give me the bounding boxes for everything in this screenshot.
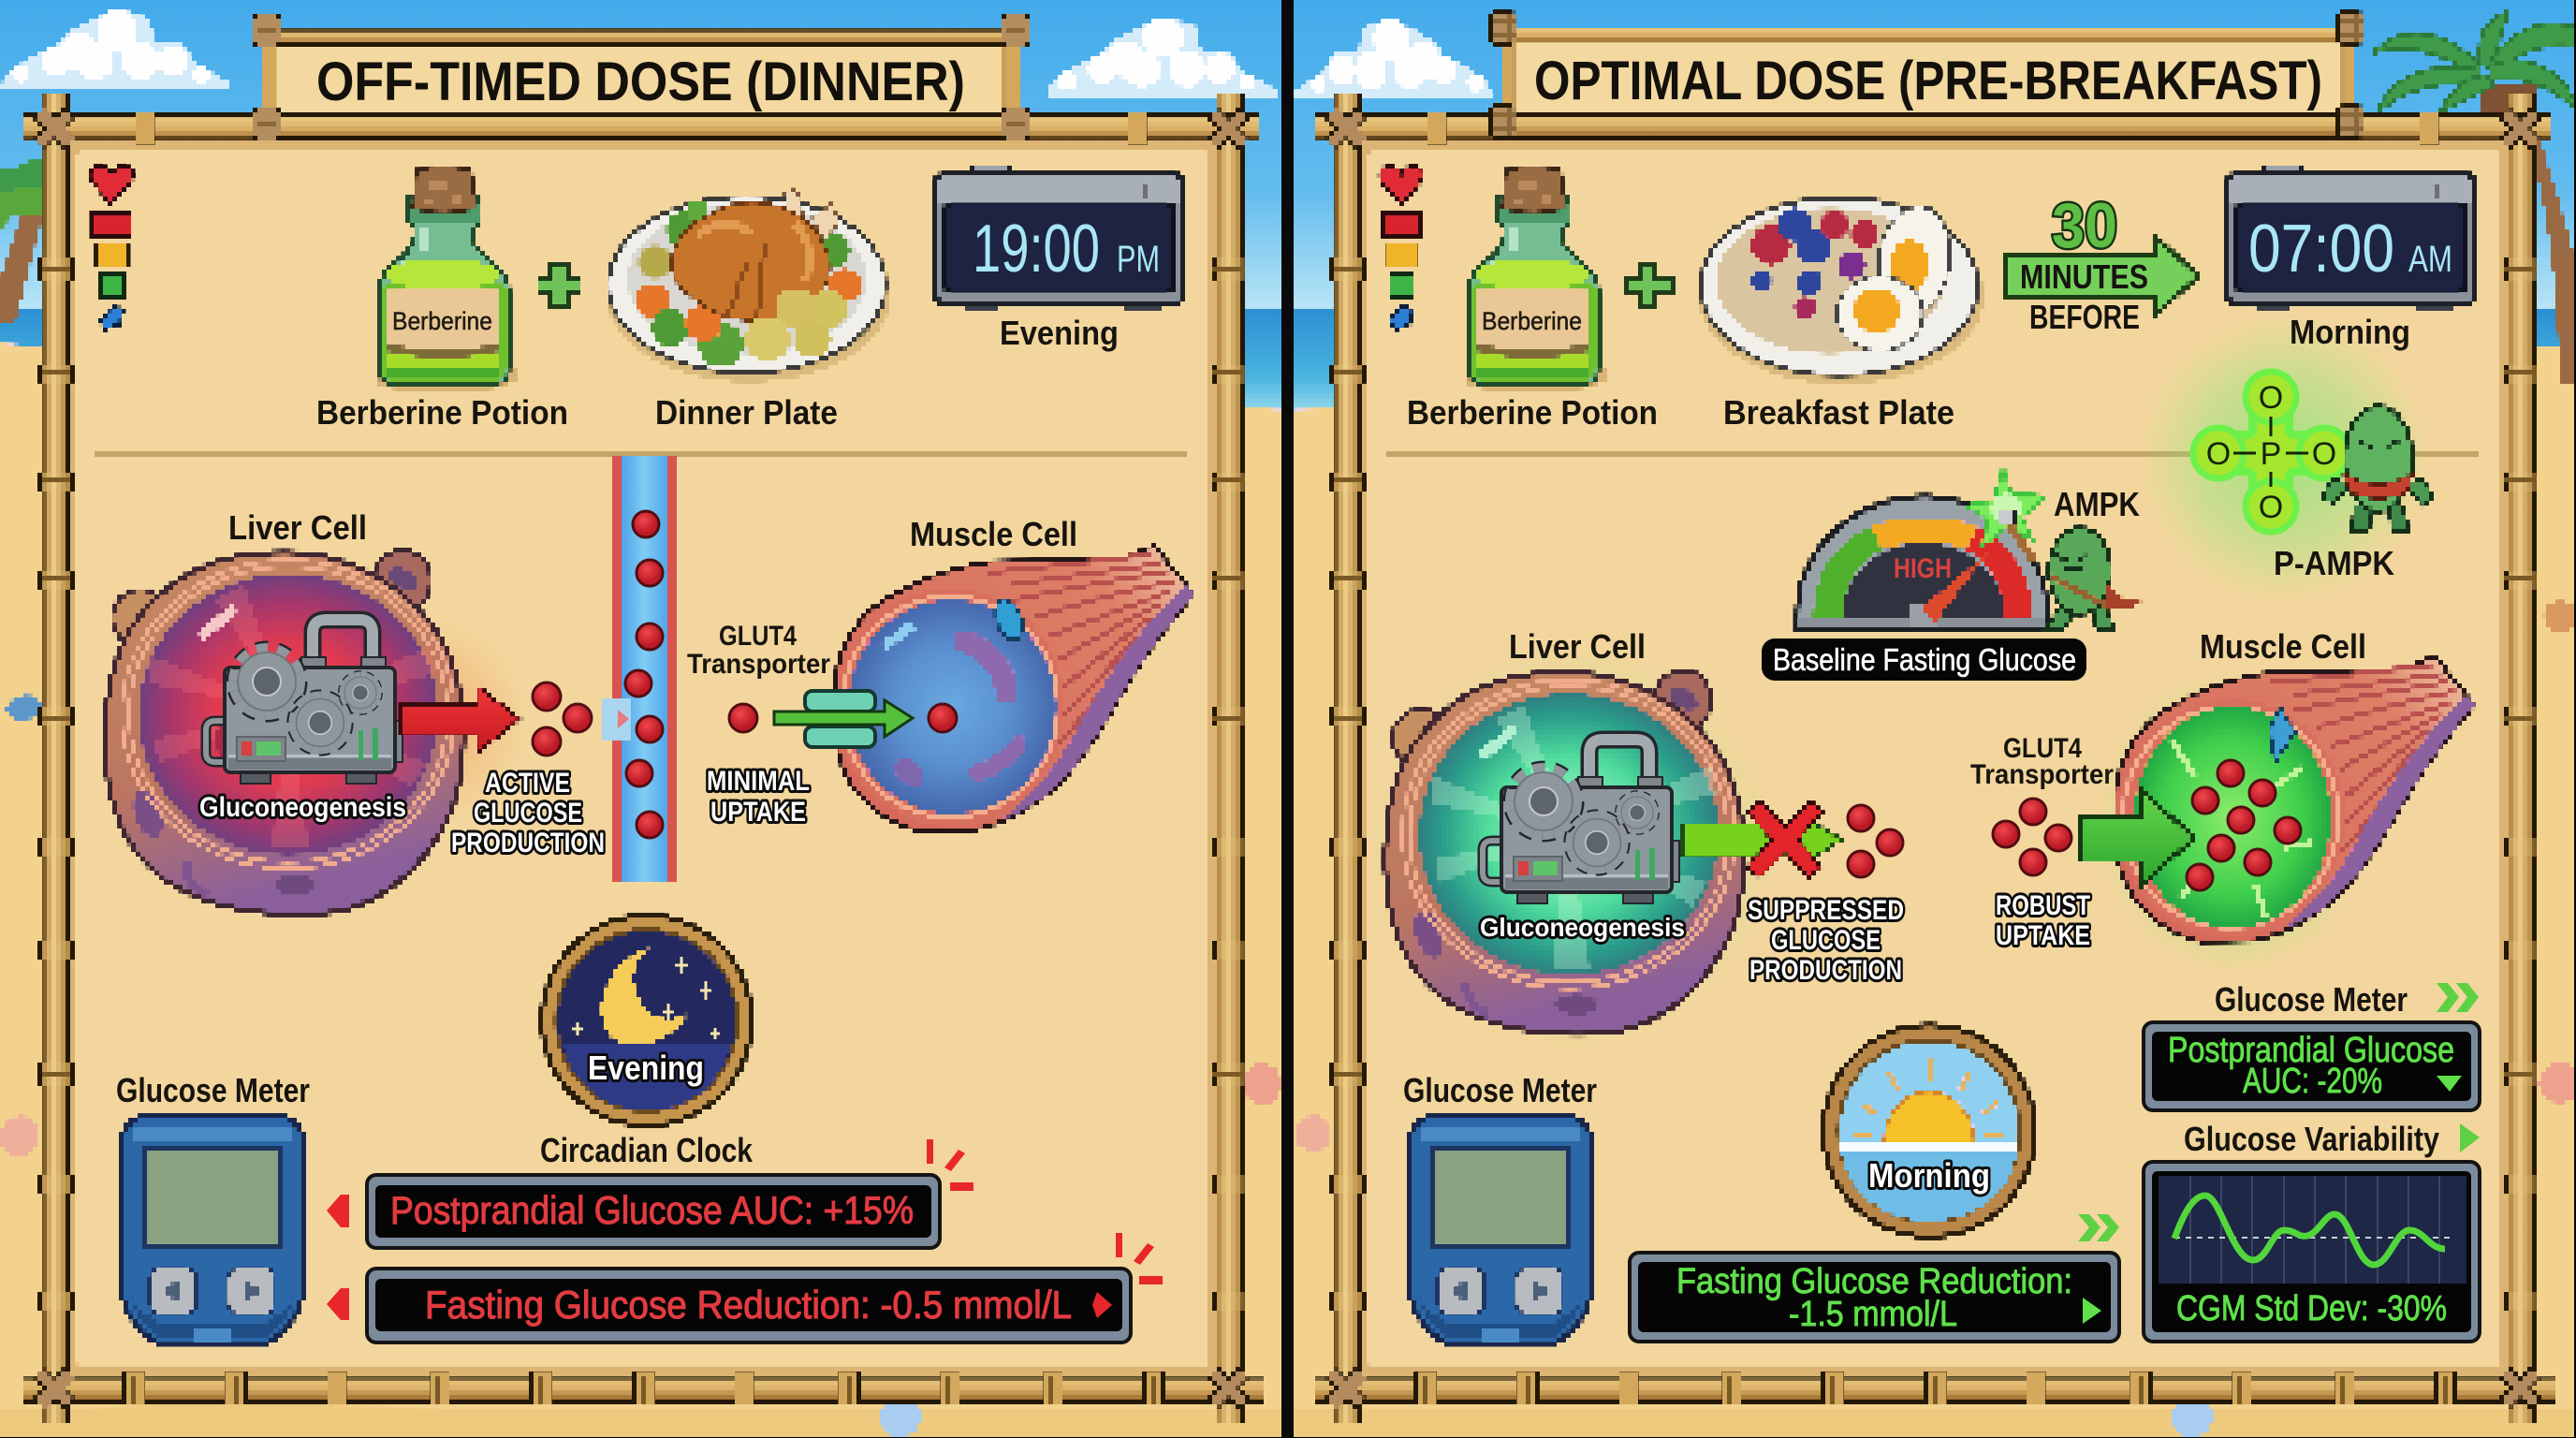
icon: dinner plate [607,190,891,382]
label: circadian clock: Circadian Clock [540,1131,754,1169]
label: breakfast plate: Breakfast Plate [1723,393,1954,432]
title plaque right [1490,12,2364,139]
arrow: 30 minutes before [2006,190,2198,336]
label: glut4 transporter [687,621,830,680]
p-ampk phosphate and creature [2139,314,2434,604]
icon: plus [538,264,580,307]
glucose dot [729,704,757,732]
status icons [1380,167,1423,330]
liver cell: green [1371,646,1774,1049]
readout: postprandial glucose [367,1175,940,1248]
machine [206,620,402,784]
gauge: baseline fasting glucose [1797,468,2142,630]
icon: plus [1626,264,1672,307]
label: minimal uptake [707,766,810,828]
arrow: 30 minutes before: MINUTES [2020,257,2148,296]
panel divider [1281,0,1294,1438]
machine [1483,740,1679,903]
readout: postprandial glucose [2144,1022,2480,1110]
panel: optimal dose [1316,12,2554,1425]
label: dinner plate: Dinner Plate [655,393,838,432]
label: robust uptake: UPTAKE [1996,920,2090,951]
label: robust uptake: ROBUST [1996,890,2090,921]
label: glut4 transporter: GLUT4 [719,621,797,652]
chevrons [2437,983,2479,1012]
icon: digital clock 19:00: PM [1117,239,1160,280]
cgm chart panel: CGM Std Dev: -30% [2176,1289,2447,1328]
label: glut4 transporter: Transporter [1970,759,2114,790]
label: glut4 transporter [1970,733,2114,790]
label: glucose meter: Glucose Meter [1403,1071,1597,1109]
arrow: red output [402,687,520,752]
circadian clock: evening [542,916,752,1125]
glucose dots [1993,799,2071,875]
arrow: 30 minutes before: 30 [2052,190,2117,261]
section divider [1386,451,2479,457]
glut4 transporter and arrow [774,691,913,747]
p-ampk phosphate and creature: O [2259,490,2283,525]
icon: glucose meter [121,1115,304,1343]
label: glucose meter: Glucose Meter [116,1071,310,1109]
bamboo frame left [24,94,1262,1425]
icon: berberine potion: Berberine [392,307,492,335]
status icons [90,167,133,330]
circadian clock: evening: Evening [588,1049,704,1087]
label: p-ampk: P-AMPK [2274,544,2394,582]
label: morning: Morning [2290,313,2410,351]
badge: baseline fasting glucose: Baseline Fasting Glucose [1773,642,2076,677]
title plaque left [254,14,1029,140]
icon: digital clock 07:00: AM [2408,239,2452,280]
alert marks [927,1139,973,1191]
icon: berberine potion [1456,167,1609,393]
label: gluconeogenesis: Gluconeogenesis [199,792,406,823]
arrows: to meter [327,1195,349,1320]
p-ampk phosphate and creature: O [2206,436,2231,472]
label: suppressed glucose production: SUPPRESSED [1748,895,1904,926]
palm trees [0,11,2576,384]
glucose dots [1848,805,1903,877]
label: suppressed glucose production: PRODUCTION [1749,955,1902,986]
label: glucose variability: Glucose Variability [2184,1120,2439,1158]
label: active glucose production [451,768,605,858]
glucose dot inside cell [929,704,957,732]
circadian clock: morning [1823,1025,2035,1237]
label: berberine potion: Berberine Potion [316,393,568,432]
icon: digital clock 19:00: 19:00 [973,212,1100,286]
glucose dots [533,682,592,756]
label: liver cell: Liver Cell [228,508,367,547]
readout: fasting glucose [367,1269,1131,1343]
label: glut4 transporter: GLUT4 [2003,733,2082,764]
clouds [0,9,1493,100]
bamboo frame right [1316,94,2554,1425]
icon: digital clock 19:00 [934,166,1184,312]
label: ampk: AMPK [2054,485,2140,523]
label: active glucose production: GLUCOSE [474,798,582,829]
title plaque right: OPTIMAL DOSE (PRE-BREAKFAST) [1534,51,2322,111]
arrow: 30 minutes before: BEFORE [2029,298,2140,336]
readout: fasting glucose: Fasting Glucose Reduction: [1676,1262,2072,1301]
muscle cell: blue [835,546,1193,831]
icon: berberine potion: Berberine [1482,307,1582,335]
p-ampk phosphate and creature: O [2259,380,2283,416]
label: berberine potion: Berberine Potion [1407,393,1658,432]
alert marks [1116,1233,1163,1284]
gauge: baseline fasting glucose: HIGH [1894,553,1952,584]
label: gluconeogenesis: Gluconeogenesis [1480,913,1685,942]
icon: digital clock 07:00: 07:00 [2248,212,2394,286]
label: muscle cell: Muscle Cell [2200,627,2366,666]
shells [0,601,2576,1438]
cgm chart panel [2144,1162,2480,1342]
arrow: robust uptake [2080,789,2194,886]
readout: fasting glucose: Fasting Glucose Reduction: -0.5 mmol/L [425,1283,1072,1327]
p-ampk phosphate and creature: P [2261,436,2281,472]
liver cell: red [105,550,529,915]
title plaque left: OFF-TIMED DOSE (DINNER) [316,51,965,112]
readout: fasting glucose: -1.5 mmol/L [1789,1295,1957,1334]
label: liver cell: Liver Cell [1509,627,1646,666]
chevrons [2078,1214,2119,1241]
muscle cell: green [2097,656,2474,972]
readout: postprandial glucose: Postprandial Glucose AUC: +15% [390,1188,914,1232]
label: evening: Evening [1000,314,1119,352]
icon: berberine potion [366,167,520,393]
icon: glucose meter [1409,1115,1592,1343]
label: glut4 transporter: Transporter [687,649,830,680]
label: robust uptake [1996,890,2090,951]
blood vessel [602,456,677,882]
section divider [95,451,1187,457]
label: suppressed glucose production: GLUCOSE [1771,925,1881,956]
label: suppressed glucose production [1748,895,1904,986]
p-ampk phosphate and creature: O [2312,436,2336,472]
glucose inside muscle [2187,760,2301,890]
readout: postprandial glucose: Postprandial Glucose [2168,1031,2454,1070]
panel: off-timed dose [24,14,1262,1425]
arrow [2460,1123,2480,1152]
blocked arrow [1683,801,1841,877]
icon: breakfast plate [1699,198,1983,384]
icon: digital clock 07:00 [2226,166,2476,312]
readout: postprandial glucose: AUC: -20% [2243,1062,2382,1101]
label: muscle cell: Muscle Cell [910,515,1077,553]
label: minimal uptake: MINIMAL [707,766,810,797]
label: glucose meter: Glucose Meter [2215,980,2408,1019]
label: minimal uptake: UPTAKE [710,797,806,828]
circadian clock: morning: Morning [1868,1156,1990,1195]
readout: fasting glucose [1630,1253,2119,1342]
label: active glucose production: ACTIVE [485,768,570,799]
label: active glucose production: PRODUCTION [451,828,605,858]
